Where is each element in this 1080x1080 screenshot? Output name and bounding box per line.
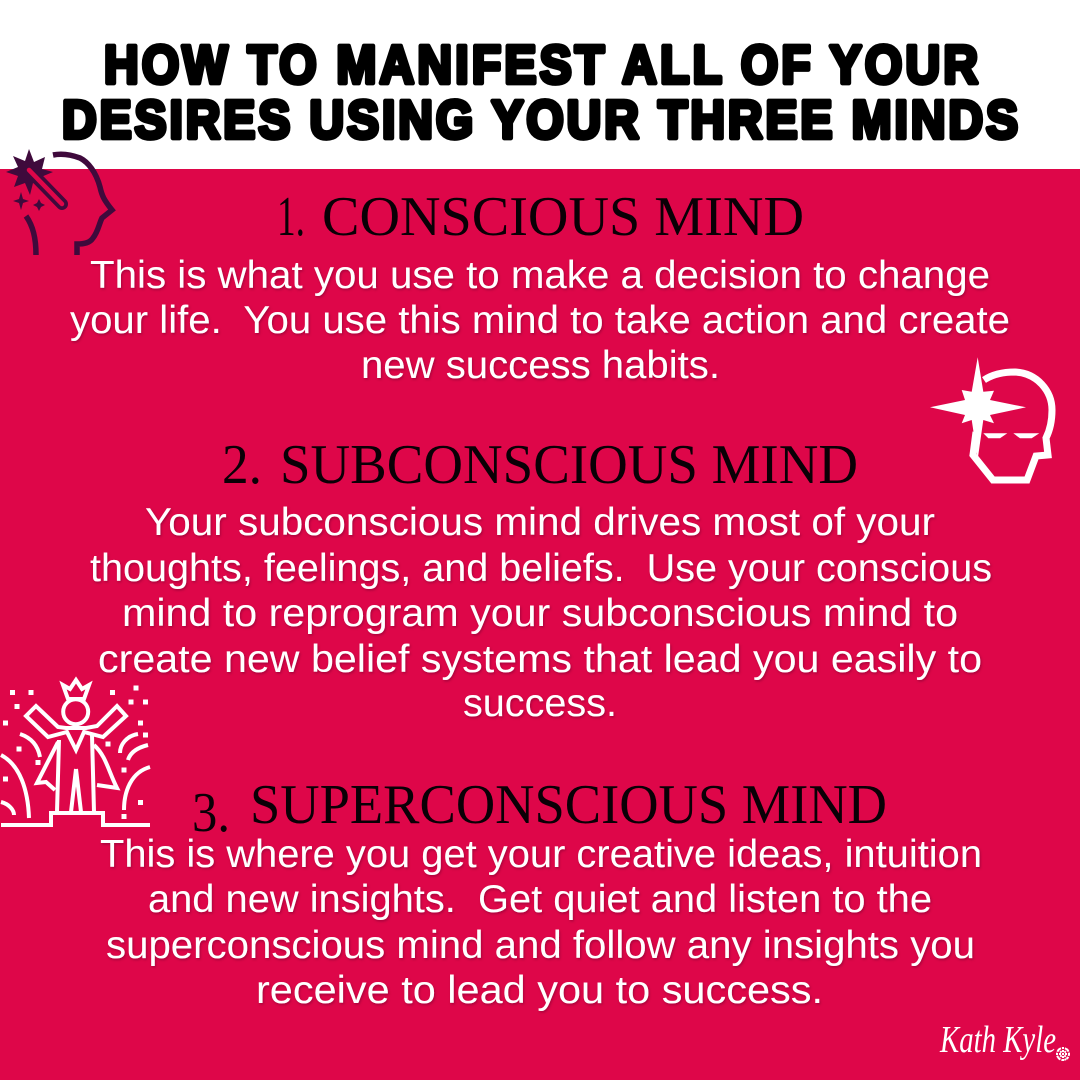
icon: crowned figure celebrating xyxy=(1,680,150,825)
title: DESIRES USING YOUR THREE MINDS xyxy=(62,89,1018,150)
text block: superconscious mind xyxy=(100,833,982,1012)
text block: subconscious mind xyxy=(90,501,992,725)
text block: conscious mind xyxy=(70,254,1010,387)
title: HOW TO MANIFEST ALL OF YOUR xyxy=(104,34,978,95)
text block: conscious mind: This is what you use to make a decision to change xyxy=(90,254,990,297)
text block: subconscious mind: success. xyxy=(463,682,617,725)
text block: conscious mind: new success habits. xyxy=(361,344,720,387)
text block: superconscious mind: receive to lead you to success. xyxy=(256,969,823,1012)
heading: conscious mind: 1. xyxy=(277,186,305,248)
text block: subconscious mind: thoughts, feelings, and beliefs. Use your conscious xyxy=(90,547,992,590)
text block: subconscious mind: create new belief systems that lead you easily to xyxy=(98,638,982,681)
text block: superconscious mind: and new insights. Get quiet and listen to the xyxy=(148,878,932,921)
heading: superconscious mind: 3. xyxy=(192,782,230,844)
text block: subconscious mind: mind to reprogram your subconscious mind to xyxy=(122,592,958,635)
heading: subconscious mind: 2. xyxy=(222,434,262,496)
icon: head with star xyxy=(930,357,1052,480)
text block: superconscious mind: superconscious mind and follow any insights you xyxy=(106,924,975,967)
icon: head with magic wand xyxy=(6,149,112,255)
heading: conscious mind: CONSCIOUS MIND xyxy=(322,186,804,248)
heading: subconscious mind: SUBCONSCIOUS MIND xyxy=(280,434,858,496)
text block: subconscious mind: Your subconscious mind drives most of your xyxy=(145,501,935,544)
text block: superconscious mind: This is where you get your creative ideas, intuition xyxy=(100,833,982,876)
heading: superconscious mind: SUPERCONSCIOUS MIND xyxy=(250,774,887,836)
icon: snowflake mark xyxy=(1056,1047,1070,1061)
text block: conscious mind: your life. You use this mind to take action and create xyxy=(70,299,1010,342)
title xyxy=(62,34,1018,150)
